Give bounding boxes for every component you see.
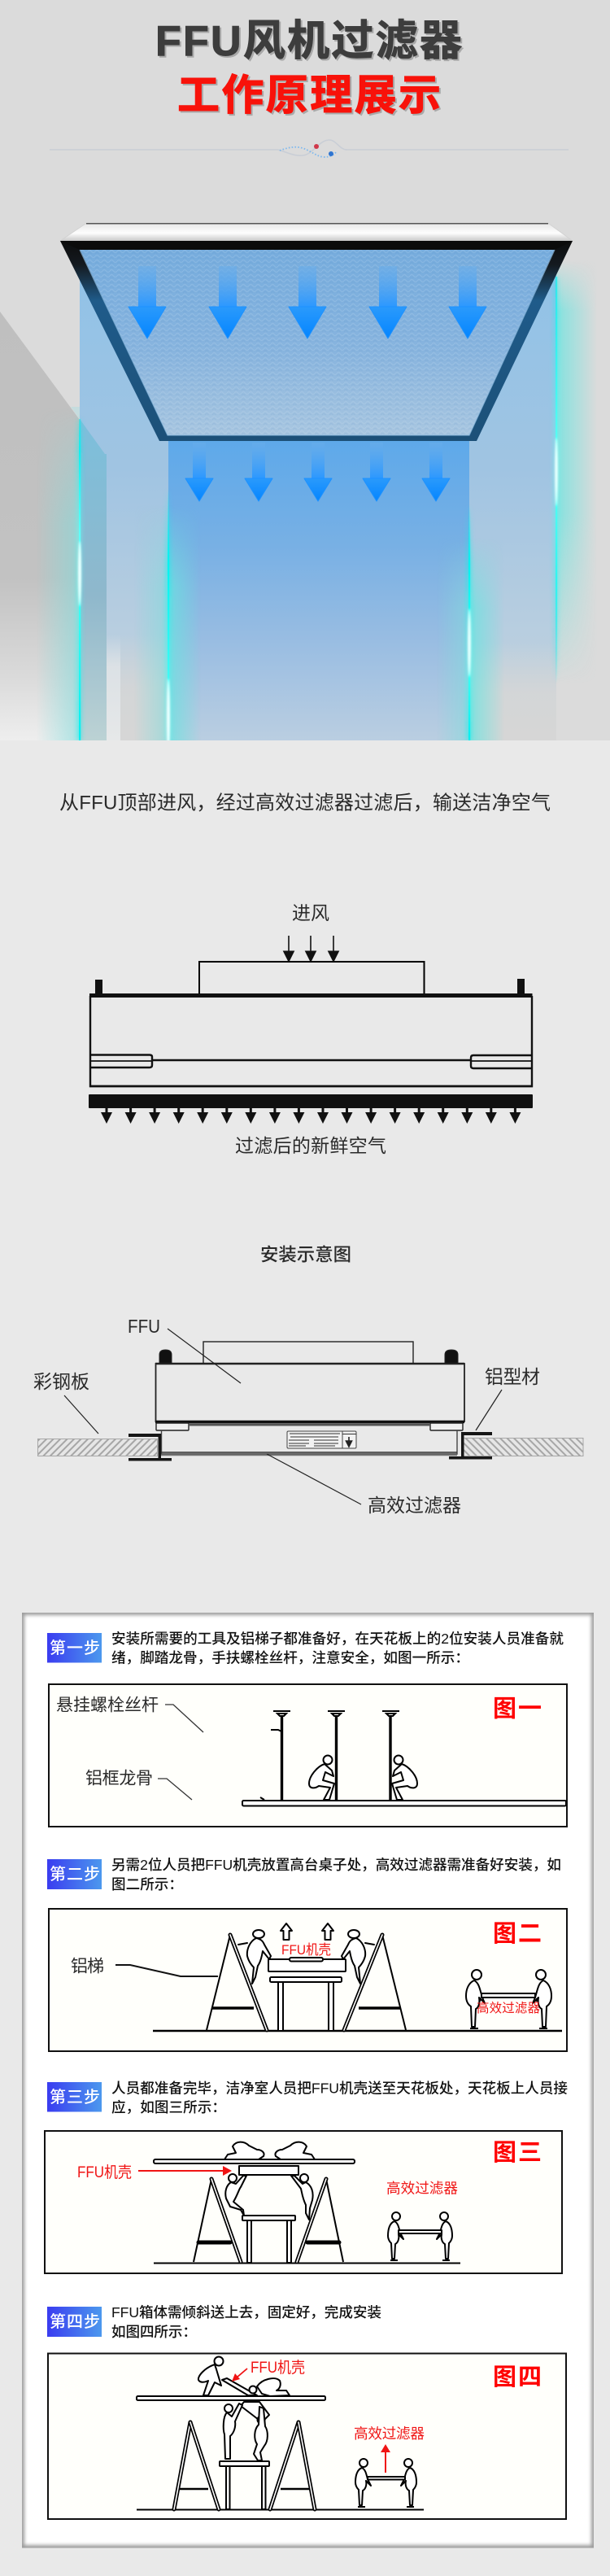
step 2 [47, 1857, 567, 2051]
badge step 1: 第一步 [50, 1639, 100, 1657]
intake arrows [283, 936, 338, 962]
filter bar [89, 1094, 533, 1108]
airflow arrows on filter [129, 266, 486, 338]
badge step 4 [47, 2307, 102, 2337]
red label and arrow HEPA filter [354, 2425, 425, 2473]
red label FFU casing: FFU机壳 [281, 1942, 331, 1958]
carriers with filter [355, 2459, 416, 2507]
label: filtered fresh air: 过滤后的新鲜空气 [235, 1135, 386, 1156]
left ladder [174, 2422, 219, 2509]
step 1 [47, 1631, 567, 1827]
installation diagram [33, 1316, 583, 1516]
people on ladders [238, 1930, 374, 1984]
badge step 2: 第二步 [50, 1865, 100, 1884]
figure 2 drawing [153, 1923, 562, 2031]
figure 3 number: 图三 [493, 2140, 542, 2166]
right ladder [270, 2422, 315, 2509]
table [242, 2216, 295, 2263]
leader rods [165, 1705, 203, 1732]
label: intake: 进风 [292, 902, 329, 923]
decorative title divider with wave and dots [50, 140, 569, 157]
aluminium bracket right [449, 1432, 492, 1460]
table [220, 2461, 269, 2509]
rooftop crouching people [224, 2142, 315, 2159]
carriers with filter [388, 2212, 452, 2260]
FFU casing [239, 2166, 298, 2175]
figure 1 label suspended rods: 悬挂螺栓丝杆 [56, 1696, 159, 1715]
clean room scene with glowing light columns [0, 244, 597, 753]
leader HEPA filter [267, 1454, 361, 1504]
step 4 text: 如图四所示： [111, 2324, 197, 2340]
right ladder [344, 1935, 406, 2030]
climbing people [225, 2174, 313, 2220]
figure 4 drawing [137, 2356, 425, 2509]
step 3 text: 人员都准备完毕，洁净室人员把FFU机壳送至天花板处，天花板上人员接 [111, 2080, 568, 2096]
slanted FFU casing and installers [198, 2356, 290, 2460]
figure 2 number: 图二 [493, 1921, 542, 1947]
steel panel right [464, 1439, 583, 1456]
fan unit housing [89, 962, 533, 1086]
label: aluminium profile: 铝型材 [485, 1366, 540, 1387]
step 1 text: 安装所需要的工具及铝梯子都准备好，在天花板上的2位安装人员准备就 [111, 1631, 564, 1647]
badge step 3: 第三步 [50, 2088, 100, 2107]
figure 4 frame [48, 2353, 566, 2519]
label: colour steel panel: 彩钢板 [33, 1371, 89, 1392]
figure 2 label ladder: 铝梯 [71, 1958, 104, 1976]
label: HEPA filter: 高效过滤器 [368, 1495, 461, 1516]
step 4 text: FFU箱体需倾斜送上去，固定好，完成安装 [111, 2304, 381, 2321]
leader ladder [115, 1965, 218, 1976]
right ladder [297, 2179, 343, 2262]
red label HEPA filter: 高效过滤器 [477, 2001, 540, 2015]
badge step 2 [47, 1859, 102, 1889]
airflow diagram [89, 902, 533, 1156]
table [270, 1977, 342, 2031]
leader steel panel [64, 1395, 98, 1434]
output arrows [101, 1108, 521, 1124]
red label and arrow FFU casing [232, 2359, 305, 2382]
step 4 [47, 2304, 566, 2519]
step 2 text: 另需2位人员把FFU机壳放置高台桌子处，高效过滤器需准备好安装，如 [111, 1857, 561, 1873]
step 2 text: 图二所示： [111, 1876, 183, 1893]
figure 3 frame [45, 2131, 562, 2273]
label: FFU: FFU [128, 1316, 160, 1337]
figure 1 drawing [242, 1711, 566, 1806]
HEPA filter frame with mesh [60, 223, 573, 441]
figure 2 frame [49, 1909, 567, 2051]
airflow arrows below filter [185, 443, 450, 501]
badge step 1 [47, 1633, 102, 1663]
carriers with filter [466, 1970, 551, 2028]
figure 1 number: 图一 [493, 1696, 542, 1722]
heading: installation diagram: 安装示意图 [260, 1245, 351, 1264]
title: 工作原理展示: 工作原理展示 [177, 72, 441, 120]
badge step 4: 第四步 [50, 2312, 100, 2331]
aluminium bracket left [129, 1434, 172, 1461]
step 3 text: 应，如图三所示： [111, 2099, 226, 2115]
up arrows [281, 1923, 333, 1940]
figure 3 drawing [77, 2142, 460, 2264]
description sentence: 从FFU顶部进风，经过高效过滤器过滤后，输送洁净空气 [59, 792, 551, 814]
red label and arrow FFU casing: FFU机壳 [251, 2359, 305, 2377]
step 3 text [111, 2080, 568, 2115]
figure 4 number: 图四 [493, 2364, 542, 2390]
HEPA filter with label plate [161, 1430, 457, 1455]
step 4 text [111, 2304, 381, 2340]
red label and arrow HEPA filter: 高效过滤器 [354, 2425, 425, 2442]
title: FFU风机过滤器: FFU风机过滤器 [155, 18, 462, 65]
installation steps panel [22, 1613, 594, 2548]
figure 1 label aluminium keel: 铝框龙骨 [85, 1769, 153, 1788]
red label HEPA filter: 高效过滤器 [386, 2181, 458, 2197]
FFU casing [268, 1958, 346, 1971]
badge step 3 [47, 2082, 102, 2112]
leader keel [158, 1779, 192, 1800]
step 3 [45, 2080, 568, 2273]
steel panel left [37, 1439, 158, 1456]
leader aluminium profile [476, 1390, 502, 1430]
step 1 text: 绪，脚踏龙骨，手扶螺栓丝杆，注意安全，如图一所示： [111, 1650, 469, 1666]
step 2 text [111, 1857, 561, 1893]
left ladder [194, 2179, 241, 2262]
figure 1 frame [49, 1684, 567, 1827]
FFU housing [155, 1342, 464, 1430]
red label and arrow FFU casing [77, 2163, 232, 2181]
leader FFU [168, 1329, 241, 1383]
step 1 text [111, 1631, 564, 1666]
red label and arrow FFU casing: FFU机壳 [77, 2163, 132, 2181]
left ladder [207, 1935, 267, 2030]
